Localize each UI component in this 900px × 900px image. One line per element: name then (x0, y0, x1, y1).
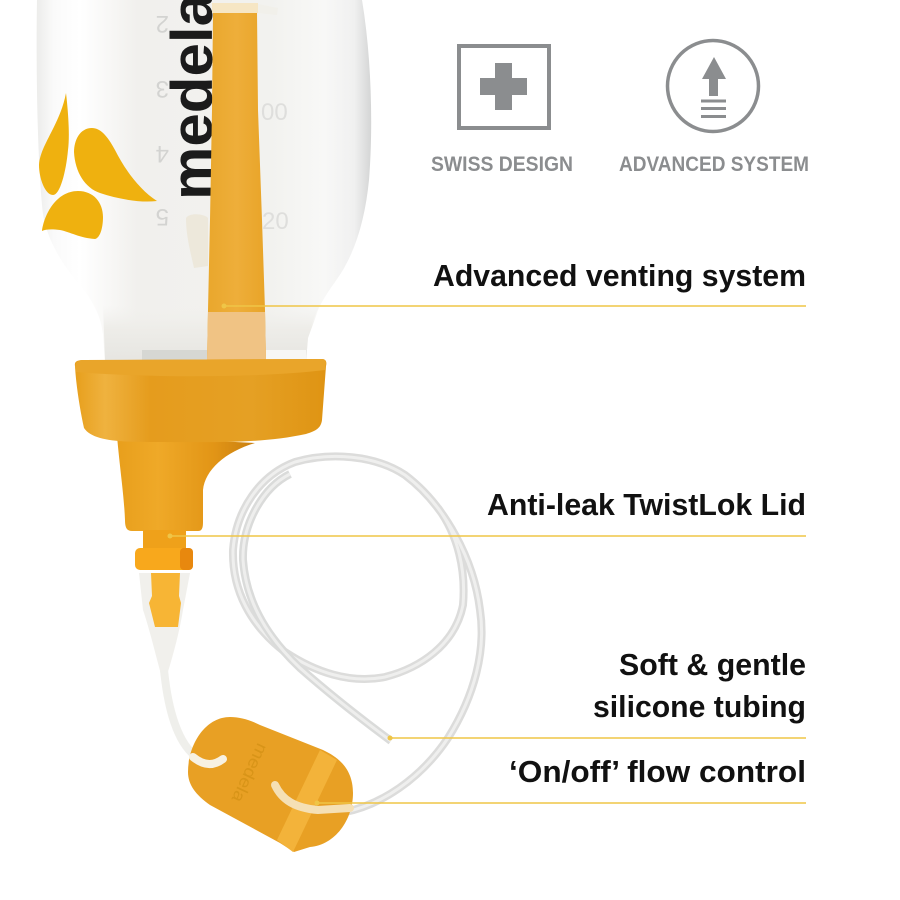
icon: advanced system arrow (668, 40, 758, 132)
label: soft and gentle: Soft & gentle (619, 647, 806, 682)
on/off flow control clamp (188, 717, 353, 852)
brand wordmark: medela (160, 0, 225, 200)
on/off flow control clamp: medela (227, 740, 272, 806)
bottle (37, 0, 371, 362)
icon: swiss cross (459, 46, 549, 128)
volume markings: 3 (156, 75, 169, 102)
nipple shadow inside bottle (186, 214, 208, 268)
icon: medela petals logo (39, 93, 157, 239)
label: advanced venting system: Advanced venting system (433, 258, 806, 293)
volume markings: 5 (156, 203, 169, 230)
volume markings: 2 (156, 10, 169, 37)
volume markings: 4 (156, 140, 169, 167)
callout lines (168, 304, 806, 806)
label: flow control: ‘On/off’ flow control (509, 754, 806, 789)
volume markings: 00 (261, 99, 288, 126)
connector nozzle (135, 530, 193, 685)
vent tube (207, 3, 278, 360)
silicone tubing (164, 456, 482, 812)
volume markings (156, 10, 289, 235)
heading: swiss design: SWISS DESIGN (431, 153, 573, 176)
inner shadow of bottle shoulder (103, 305, 320, 362)
label: anti-leak lid: Anti-leak TwistLok Lid (487, 487, 806, 522)
heading: advanced system: ADVANCED SYSTEM (619, 153, 809, 176)
volume markings: 20 (262, 208, 289, 235)
label: silicone tubing: silicone tubing (593, 689, 806, 724)
lid collar and neck (75, 359, 326, 531)
